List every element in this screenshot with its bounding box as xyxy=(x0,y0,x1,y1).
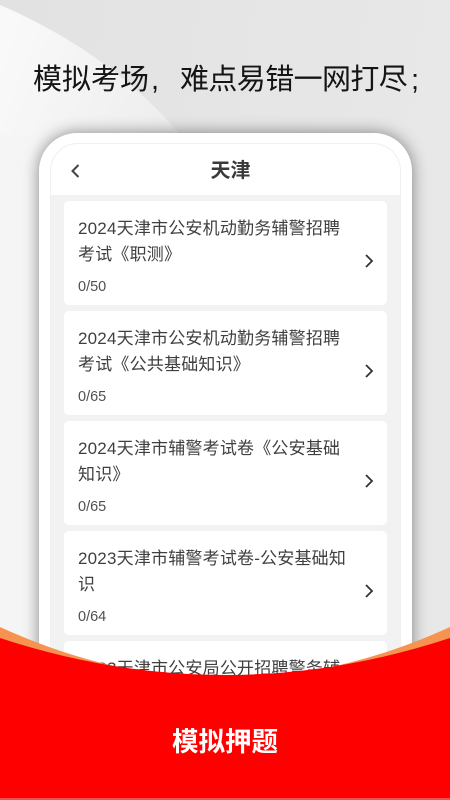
card 5 xyxy=(64,641,387,745)
card 1: 2024天津市公安机动勤务辅警招聘 xyxy=(78,219,340,238)
card 2: 0/65 xyxy=(78,389,106,405)
card 4 xyxy=(64,531,387,635)
nav title: 天津 xyxy=(210,160,250,182)
banner label: 模拟押题 xyxy=(172,727,278,757)
title: 难点易错一网打尽 xyxy=(180,64,407,96)
card 1: 考试《职测》 xyxy=(78,245,181,264)
card 4: 0/64 xyxy=(78,609,106,625)
card 2: 2024天津市公安机动勤务辅警招聘 xyxy=(78,329,340,348)
card 4: 2023天津市辅警考试卷-公安基础知 xyxy=(78,549,346,568)
card 3: 0/65 xyxy=(78,499,106,515)
card 1 xyxy=(64,201,387,305)
card 4: 识 xyxy=(78,575,95,594)
card 3: 知识》 xyxy=(78,465,130,484)
title: ; xyxy=(411,64,419,96)
title: , xyxy=(151,64,159,96)
phone screen xyxy=(50,143,401,800)
card 2 xyxy=(64,311,387,415)
title xyxy=(33,64,419,96)
red area xyxy=(0,638,450,798)
card 3: 2024天津市辅警考试卷《公安基础 xyxy=(78,439,340,458)
nav bar xyxy=(51,144,400,195)
card 2: 考试《公共基础知识》 xyxy=(78,355,250,374)
title: 模拟考场 xyxy=(33,64,149,96)
icon: back arrow xyxy=(71,164,80,178)
card 1: 0/50 xyxy=(78,279,106,295)
card 3 xyxy=(64,421,387,525)
phone mockup xyxy=(39,133,412,800)
orange curve xyxy=(0,627,450,800)
red bottom banner xyxy=(0,627,450,800)
card 5: 2023天津市公安局公开招聘警务辅 xyxy=(78,659,340,678)
